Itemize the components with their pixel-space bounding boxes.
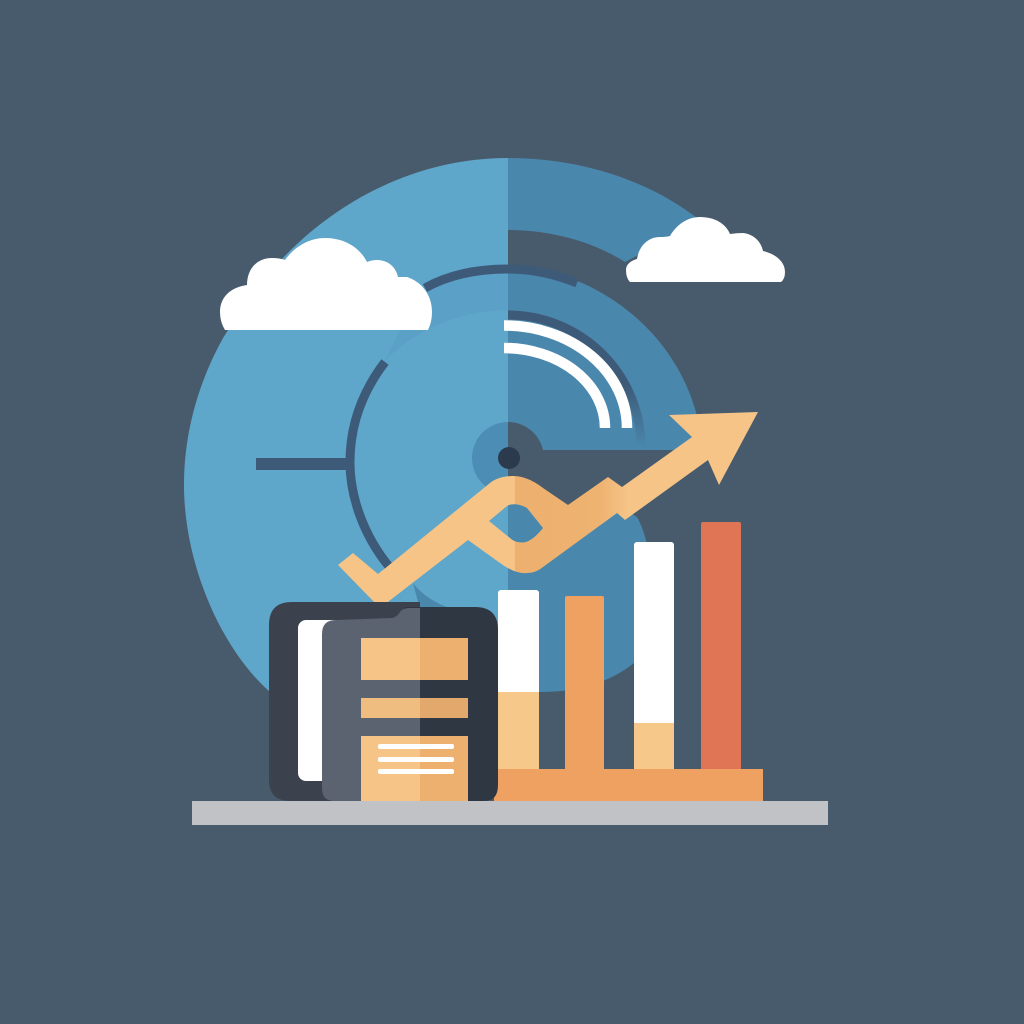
- dial: blue disc: [184, 158, 702, 692]
- right lower disc: [508, 270, 698, 692]
- bar 2: [565, 596, 604, 771]
- lower wedge shade: [413, 583, 452, 609]
- peach block 3: [361, 736, 468, 801]
- cloud right: [626, 217, 785, 282]
- right upper arc band: [508, 158, 702, 262]
- peach block 1: [361, 638, 468, 680]
- ring arc top: [425, 269, 577, 288]
- white page: [298, 620, 358, 781]
- bar chart: [494, 522, 763, 802]
- cloud left: [220, 238, 432, 330]
- hub dot: [498, 447, 520, 469]
- needle wedge: [508, 422, 680, 510]
- tablet back right: [405, 607, 498, 801]
- text lines: [378, 744, 454, 774]
- white arc outer: [504, 326, 627, 428]
- ring arc left: [350, 362, 392, 570]
- hub left: [472, 422, 508, 486]
- left annulus shade: [384, 273, 508, 362]
- rising arrow: [338, 412, 758, 608]
- tablet device: [269, 602, 498, 801]
- dark arc: [508, 315, 641, 447]
- bar 4: [701, 522, 741, 771]
- bar 1: [498, 590, 539, 770]
- tablet back left: [269, 602, 420, 801]
- peach block 2: [361, 698, 468, 718]
- chart base: [494, 769, 763, 802]
- shelf: [192, 801, 828, 825]
- bar 3: [634, 542, 674, 770]
- white arc inner: [504, 348, 605, 428]
- left half of disc: [184, 158, 508, 692]
- left tick: [256, 458, 346, 470]
- tablet front: [322, 608, 420, 801]
